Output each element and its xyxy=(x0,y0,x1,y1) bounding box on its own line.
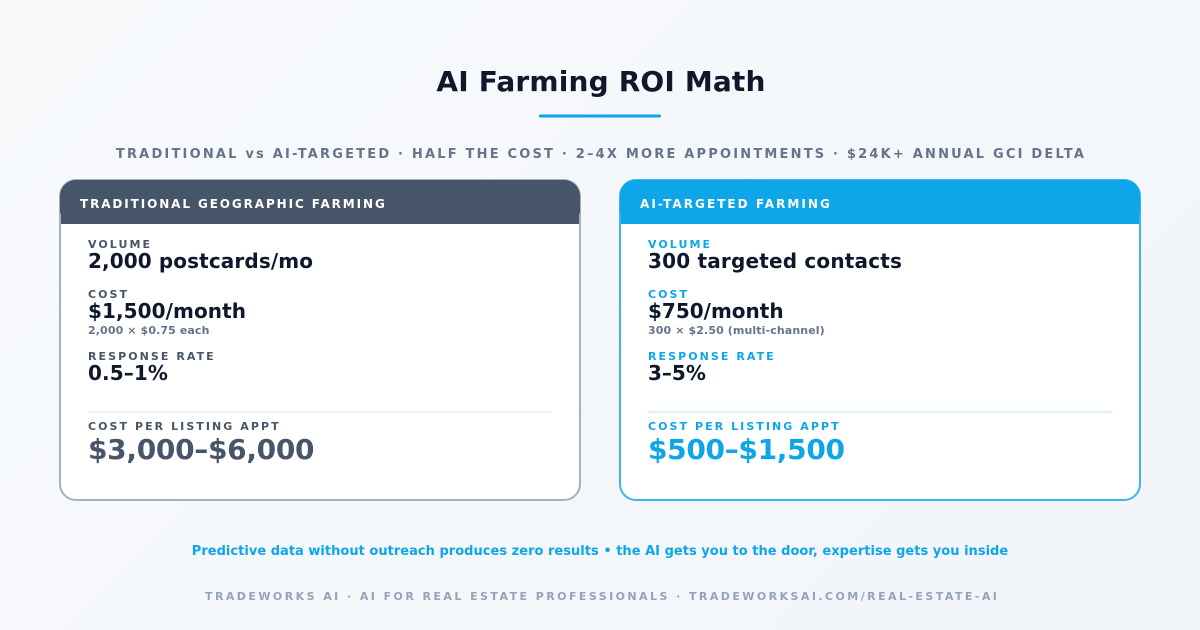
metric: cost per listing appointment: $500–$1,500 xyxy=(648,433,845,466)
metric: volume: VOLUME xyxy=(648,238,712,251)
metric: response rate: 3–5% xyxy=(648,361,706,385)
metric: volume: VOLUME xyxy=(88,238,152,251)
footer: TRADEWORKS AI · AI FOR REAL ESTATE PROFESSIONALS · TRADEWORKSAI.COM/REAL-ESTATE-AI xyxy=(205,590,999,603)
metric: volume: 2,000 postcards/mo xyxy=(88,249,313,273)
metric: cost: COST xyxy=(648,288,689,301)
metric: response rate xyxy=(88,350,216,385)
metric: cost: 300 × $2.50 (multi-channel) xyxy=(648,324,825,337)
metric: response rate: RESPONSE RATE xyxy=(88,350,216,363)
metric: response rate: 0.5–1% xyxy=(88,361,168,385)
title: AI Farming ROI Math xyxy=(436,65,766,98)
metric: cost per listing appointment: COST PER LISTING APPT xyxy=(88,420,281,433)
panel: AI-targeted farming xyxy=(640,197,902,466)
metric: cost: COST xyxy=(88,288,129,301)
metric: volume xyxy=(648,238,902,273)
header label: AI-targeted: AI-TARGETED FARMING xyxy=(640,197,832,211)
metric: response rate xyxy=(648,350,776,385)
metric: cost per listing appointment: COST PER LISTING APPT xyxy=(648,420,841,433)
metric: cost xyxy=(648,288,825,337)
metric: cost: $1,500/month xyxy=(88,299,246,323)
panel: traditional geographic farming xyxy=(80,197,387,466)
metric: cost xyxy=(88,288,246,337)
metric: cost per listing appointment: $3,000–$6,000 xyxy=(88,433,314,466)
metric: cost: $750/month xyxy=(648,299,784,323)
header label: traditional: TRADITIONAL GEOGRAPHIC FARMING xyxy=(80,197,387,211)
metric: response rate: RESPONSE RATE xyxy=(648,350,776,363)
takeaway line: Predictive data without outreach produces zero results • the AI gets you to the door, expertise gets you inside xyxy=(192,544,1008,559)
subtitle: TRADITIONAL vs AI-TARGETED · HALF THE COST · 2–4X MORE APPOINTMENTS · $24K+ ANNUAL GCI DELTA xyxy=(116,147,1086,162)
metric: cost: 2,000 × $0.75 each xyxy=(88,324,210,337)
metric: volume xyxy=(88,238,313,273)
metric: volume: 300 targeted contacts xyxy=(648,249,902,273)
